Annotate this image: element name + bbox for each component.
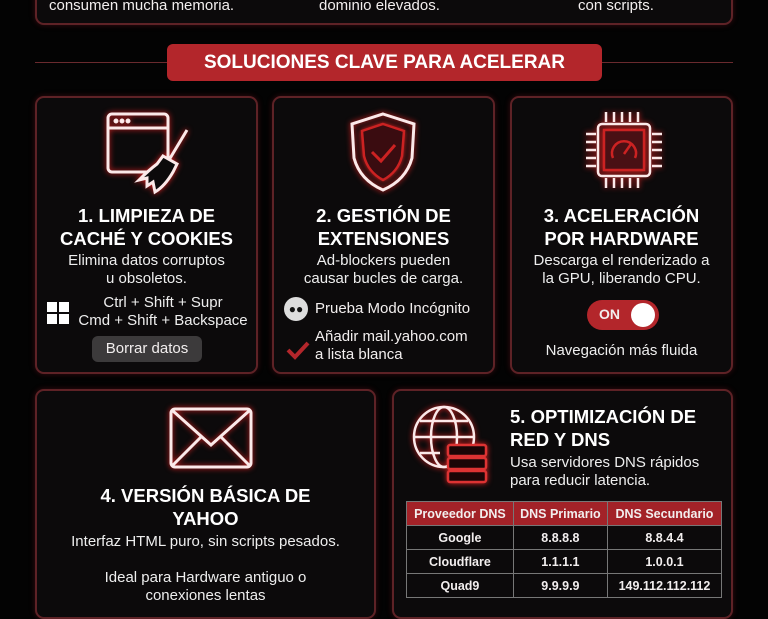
heading: card 2 [316, 205, 451, 249]
text: card 3 desc: Descarga el renderizado a [534, 252, 709, 269]
text: card 2 desc: Ad-blockers pueden [317, 252, 450, 269]
text: card 5 desc [510, 454, 699, 489]
table: dns: 8.8.8.8 [541, 530, 580, 544]
heading: card 4 [100, 485, 311, 529]
heading: card 4: 4. VERSIÓN BÁSICA DE [100, 485, 311, 506]
heading: card 5 [510, 406, 696, 450]
text: card 2 desc: causar bucles de carga. [304, 270, 463, 287]
text: card 2 desc [304, 252, 463, 287]
panel: card 3 hardware [510, 96, 733, 374]
table: dns: Proveedor DNS [414, 506, 506, 520]
text: navegacion: Navegación más fluida [546, 342, 697, 359]
heading: card 3: POR HARDWARE [544, 228, 699, 249]
toggle: ON: ON [599, 306, 620, 322]
heading: card 1: CACHÉ Y COOKIES [60, 228, 233, 249]
text: card 4 desc: Interfaz HTML puro, sin scripts pesados. [71, 533, 340, 550]
panel: card 4 basic yahoo [35, 389, 376, 619]
text: card 3 desc: la GPU, liberando CPU. [542, 270, 701, 287]
icon: windows [47, 302, 69, 324]
icon: incognito: ●● [289, 302, 303, 316]
heading: card 2: 2. GESTIÓN DE [316, 205, 451, 226]
icon: shield [346, 108, 420, 196]
icon: incognito [284, 297, 308, 321]
text: card 1 desc [68, 252, 225, 287]
table: dns: 1.1.1.1 [541, 554, 580, 568]
text: shortcuts: Ctrl + Shift + Supr [103, 294, 223, 311]
text: card 4 ideal [105, 569, 306, 604]
text: whitelist: Añadir mail.yahoo.com [315, 328, 468, 345]
table: dns: 149.112.112.112 [619, 578, 710, 592]
icon: browser broom [102, 108, 192, 198]
table: dns: DNS Secundario [615, 506, 713, 520]
text: card 1 desc: u obsoletos. [106, 270, 187, 287]
icon: check [286, 342, 310, 360]
table: dns: 8.8.4.4 [645, 530, 684, 544]
heading: card 3 [544, 205, 699, 249]
text: card 4 ideal: conexiones lentas [145, 587, 266, 604]
heading: card 1 [60, 205, 233, 249]
text: whitelist [315, 328, 468, 363]
heading: card 1: 1. LIMPIEZA DE [78, 205, 215, 226]
panel: card 2 extensiones [272, 96, 495, 374]
icon: globe server [408, 401, 492, 488]
heading: soluciones [167, 44, 602, 81]
icon: envelope [164, 402, 258, 474]
heading: card 4: YAHOO [172, 508, 239, 529]
table: dns: Google [438, 530, 481, 544]
text: shortcuts [78, 294, 248, 329]
text: card 5 desc: Usa servidores DNS rápidos [510, 454, 699, 471]
heading: soluciones: SOLUCIONES CLAVE PARA ACELERAR [204, 52, 565, 73]
button: borrar datos [92, 336, 202, 362]
heading: card 5: 5. OPTIMIZACIÓN DE [510, 406, 696, 427]
heading: card 3: 3. ACELERACIÓN [544, 205, 699, 226]
toggle: ON [587, 300, 659, 330]
table: dns: 9.9.9.9 [541, 578, 580, 592]
text: incognito: Prueba Modo Incógnito [315, 300, 470, 317]
icon: chip gauge [582, 108, 666, 192]
text: card 5 desc: para reducir latencia. [510, 472, 650, 489]
table: dns: 1.0.0.1 [645, 554, 684, 568]
table: dns: Cloudflare [429, 554, 491, 568]
table: dns [406, 501, 722, 598]
panel: card 5 dns [392, 389, 733, 619]
text: card 1 desc: Elimina datos corruptos [68, 252, 225, 269]
heading: card 2: EXTENSIONES [318, 228, 449, 249]
text: shortcuts: Cmd + Shift + Backspace [78, 312, 248, 329]
table: dns: DNS Primario [520, 506, 601, 520]
panel: top causes (cut off) [35, 0, 733, 25]
heading: card 5: RED Y DNS [510, 429, 610, 450]
button: borrar datos: Borrar datos [106, 340, 188, 357]
text: card 4 ideal: Ideal para Hardware antiguo o [105, 569, 306, 586]
text: whitelist: a lista blanca [315, 346, 403, 363]
table: dns: Quad9 [440, 578, 479, 592]
text: card 3 desc [534, 252, 710, 287]
panel: card 1 cache [35, 96, 258, 374]
